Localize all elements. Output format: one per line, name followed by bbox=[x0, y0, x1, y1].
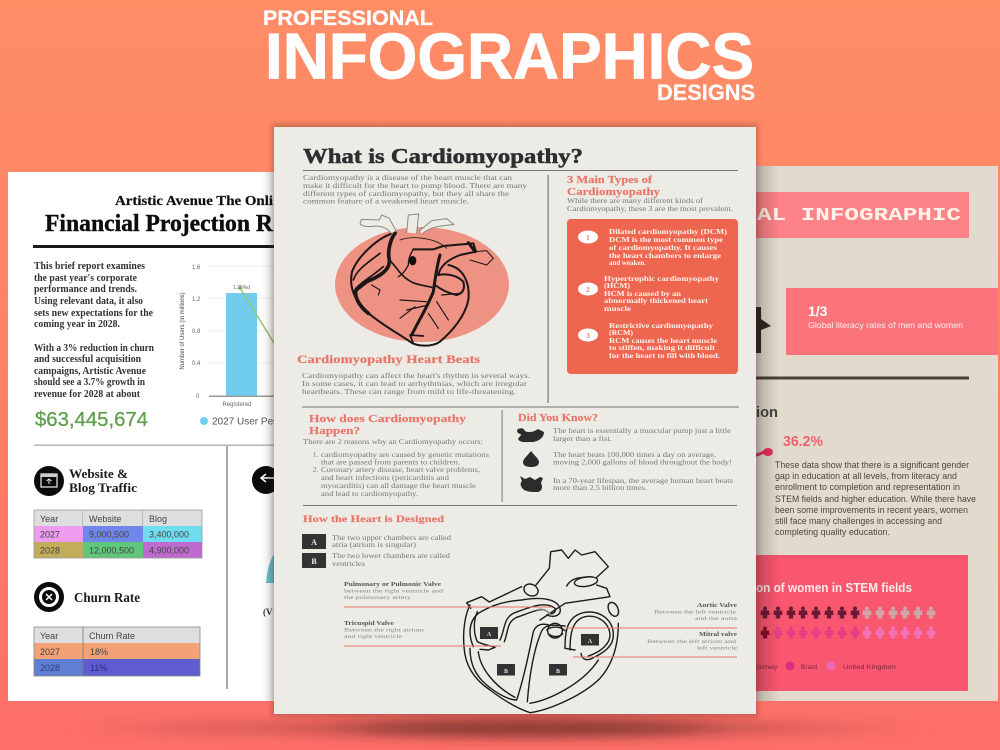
chamber labels: A bbox=[588, 639, 593, 645]
table: website and blog traffic: Website bbox=[89, 514, 121, 524]
types intro text: Cardiomyopathy, these 3 are the most prevalent. bbox=[567, 206, 733, 213]
paragraph: gender gap: been some improvements in recent years, women bbox=[775, 505, 968, 515]
title: INFOGRAPHICS bbox=[265, 20, 754, 92]
illustration: anatomical heart bbox=[335, 214, 509, 346]
chamber labels: B bbox=[504, 669, 508, 675]
type 3: to stiffen, making it difficult bbox=[609, 345, 716, 352]
callout: tricuspid valve: Tricuspid Valve bbox=[344, 621, 394, 627]
list: reasons: myocarditis) can all damage the heart muscle bbox=[321, 483, 476, 490]
table: churn rate: Year bbox=[40, 631, 58, 641]
callout: pulmonary valve: the pulmonary artery bbox=[344, 595, 411, 601]
report intro text: Using relevant data, it also bbox=[34, 296, 143, 307]
type 2: 2 bbox=[586, 286, 590, 294]
table: churn rate: 2027 bbox=[40, 647, 60, 657]
panel: three types card bbox=[567, 219, 738, 374]
website and blog traffic heading: Blog Traffic bbox=[69, 480, 137, 495]
list: reasons: There are 2 reasons why an Cardiomyopathy occurs: bbox=[303, 439, 483, 446]
type 2: (HCM) bbox=[604, 283, 630, 290]
callout: mitral valve: Mitral valve bbox=[699, 632, 737, 638]
list: reasons: and lead to cardiomyopathy. bbox=[321, 491, 418, 498]
paragraph: heart beats: Cardiomyopathy can affect the heart's rhythm in several ways. bbox=[302, 372, 530, 380]
report intro text: revenue for 2028 at about bbox=[34, 389, 141, 400]
callout: pulmonary valve: between the right ventricle and bbox=[344, 588, 443, 594]
bar chart bbox=[180, 264, 274, 425]
intro text: common feature of a weakened heart muscle. bbox=[303, 198, 469, 206]
callout: mitral valve: Between the left atrium and bbox=[647, 638, 736, 645]
did you know fact 3 bbox=[553, 478, 733, 492]
panel: women in STEM pictogram: Brazil bbox=[801, 664, 818, 671]
type 1: Dilated cardiomyopathy (DCM) bbox=[609, 229, 727, 236]
did you know fact 1: larger than a fist. bbox=[553, 436, 612, 443]
panel: women in STEM pictogram: Germany bbox=[756, 664, 778, 671]
table: website and blog traffic: 9,000,500 bbox=[89, 530, 129, 540]
type 3: for the heart to fill with blood. bbox=[609, 353, 720, 360]
panel: financial projection report bbox=[8, 172, 285, 701]
type 3: RCM causes the heart muscle bbox=[609, 338, 717, 345]
legend: chamber A: atria (atrium is singular) bbox=[332, 542, 416, 549]
did you know fact 3: more than 2.5 billion times. bbox=[553, 485, 647, 492]
did you know fact 2: The heart beats 100,000 times a day on average, bbox=[553, 452, 716, 459]
callout: tricuspid valve: Between the right atrium bbox=[344, 628, 425, 634]
report heading bbox=[45, 194, 274, 237]
legend: chamber B: The two lower chambers are called bbox=[332, 553, 451, 560]
type 1: DCM is the most common type bbox=[609, 237, 723, 244]
callout: aortic valve: and the aorta bbox=[695, 616, 738, 622]
website and blog traffic heading bbox=[69, 469, 137, 494]
banner: infographic title bbox=[740, 192, 969, 238]
clipped right column of the report bbox=[252, 466, 274, 617]
type 1: and weaken. bbox=[609, 260, 646, 267]
callout: mitral valve bbox=[573, 632, 738, 658]
paragraph: gender gap: completing quality education. bbox=[775, 527, 890, 537]
panel: global education infographic bbox=[740, 166, 998, 701]
list: reasons: that are passed from parents to children. bbox=[321, 460, 460, 466]
report intro text: should see a 3.7% growth in bbox=[34, 377, 145, 388]
main panel shadow bbox=[272, 124, 758, 716]
stat: literacy 1/3: Global literacy rates of men and women bbox=[808, 321, 963, 330]
bar chart: 0.4 bbox=[192, 361, 201, 367]
bar chart: Number of Users (in millions) bbox=[180, 292, 186, 370]
callout: tricuspid valve: and right ventricle bbox=[344, 634, 403, 640]
did you know fact 2 bbox=[553, 452, 732, 466]
report intro text bbox=[34, 261, 154, 400]
illustration: heart cross-section bbox=[464, 550, 621, 713]
section heading fragment: ion bbox=[756, 404, 778, 421]
type 2: muscle bbox=[604, 306, 631, 313]
report intro text: and successful acquisition bbox=[34, 354, 141, 365]
stat: literacy 1/3: 1/3 bbox=[808, 303, 828, 319]
report intro text: the past year's corporate bbox=[34, 273, 138, 284]
paragraph: heart beats: heartbeats. These can range from mild to life-threatening. bbox=[302, 388, 516, 396]
did you know fact 1: The heart is essentially a muscular pump just a little bbox=[553, 428, 731, 435]
stat: 36.2% bbox=[745, 433, 823, 456]
callout: aortic valve: Between the left ventricle bbox=[654, 608, 737, 616]
type 2: abnormally thickened heart bbox=[604, 298, 709, 305]
icon: churn x bbox=[34, 582, 64, 612]
icon: person figure bbox=[756, 307, 771, 353]
legend: chamber A: A bbox=[311, 538, 317, 547]
intro text bbox=[303, 174, 528, 206]
table: churn rate bbox=[34, 627, 200, 676]
icon: muscle bbox=[517, 428, 544, 442]
list: reasons: 1. bbox=[313, 452, 318, 459]
panel: women in STEM pictogram: United Kingdom bbox=[843, 664, 896, 671]
intro text: make it difficult for the heart to pump blood. There are many bbox=[303, 182, 528, 190]
type 2: HCM is caused by an bbox=[604, 291, 681, 298]
paragraph: gender gap bbox=[775, 460, 976, 537]
did you know fact 1 bbox=[553, 428, 731, 443]
paragraph: gender gap: gap in education at all levels, from literacy and bbox=[775, 471, 957, 481]
list: reasons: and heart infections (pericarditis and bbox=[321, 475, 450, 482]
report intro text: This brief report examines bbox=[34, 261, 145, 272]
stat: 36.2%: 36.2% bbox=[783, 433, 823, 450]
type 3: 3 bbox=[586, 332, 590, 340]
heading: heart beats: Cardiomyopathy Heart Beats bbox=[297, 352, 480, 366]
type 3 bbox=[578, 323, 720, 360]
report intro text: performance and trends. bbox=[34, 284, 137, 295]
callout: tricuspid valve bbox=[344, 621, 501, 646]
heading: how does it happen bbox=[309, 414, 466, 437]
paragraph: heart beats bbox=[302, 372, 530, 396]
icon: heart bbox=[520, 476, 543, 492]
heading: how does it happen: Happen? bbox=[309, 426, 360, 437]
list: reasons bbox=[303, 439, 489, 498]
paragraph: gender gap: still face many challenges in accessing and bbox=[775, 516, 942, 526]
icon: website monitor bbox=[34, 466, 64, 496]
type 3: (RCM) bbox=[609, 330, 633, 337]
report heading: Artistic Avenue The Onli bbox=[115, 194, 273, 209]
title: DESIGNS bbox=[657, 80, 755, 105]
report intro text: campaigns, Artistic Avenue bbox=[34, 366, 147, 377]
bar chart: 0 bbox=[196, 394, 200, 400]
type 1: of cardiomyopathy. It causes bbox=[609, 245, 717, 252]
intro text: different types of cardiomyopathy, but they all share the bbox=[303, 190, 509, 198]
callout: aortic valve bbox=[565, 603, 738, 628]
main heading: What is Cardiomyopathy? bbox=[303, 144, 583, 168]
clipped right column of the report: (V bbox=[263, 607, 273, 617]
type 3: Restrictive cardiomyopathy bbox=[609, 323, 714, 330]
chamber labels: B bbox=[556, 669, 560, 675]
did you know fact 2: moving 2,000 gallons of blood throughout the body! bbox=[553, 460, 732, 466]
paragraph: heart beats: In some cases, it can lead to arrhythmias, which are irregular bbox=[302, 380, 528, 388]
intro text: Cardiomyopathy is a disease of the heart muscle that can bbox=[303, 174, 513, 182]
title: PROFESSIONAL bbox=[263, 7, 433, 30]
table: website and blog traffic: 3,400,000 bbox=[149, 530, 189, 540]
report intro text: With a 3% reduction in churn bbox=[34, 343, 154, 354]
paragraph: gender gap: enrollment to completion and representation in bbox=[775, 482, 960, 492]
callout: pulmonary valve: Pulmonary or Pulmonic Valve bbox=[344, 582, 441, 588]
bar chart: Registered bbox=[222, 402, 252, 408]
table: churn rate: 18% bbox=[90, 647, 108, 657]
panel: women in STEM pictogram bbox=[740, 555, 968, 691]
bar chart: 0.8 bbox=[192, 329, 201, 335]
chamber labels bbox=[480, 627, 599, 676]
did you know fact 3: In a 70-year lifespan, the average human heart beats bbox=[553, 478, 733, 485]
types intro text bbox=[567, 198, 733, 213]
heading: how does it happen: How does Cardiomyopathy bbox=[309, 414, 466, 425]
callout: mitral valve: left ventricle bbox=[697, 644, 738, 652]
types intro text: While there are many different kinds of bbox=[567, 198, 704, 205]
table: churn rate: 2028 bbox=[40, 663, 60, 673]
paragraph: gender gap: STEM fields and higher education. While there have bbox=[775, 494, 976, 504]
table: website and blog traffic: 2028 bbox=[40, 546, 60, 556]
stat: literacy 1/3 bbox=[786, 288, 998, 355]
report heading: Financial Projection R bbox=[45, 211, 274, 237]
revenue figure: $63,445,674 bbox=[35, 409, 148, 431]
ground shadow bbox=[120, 719, 880, 737]
type 1 bbox=[578, 229, 727, 267]
bar chart: 1.2 bbox=[192, 297, 201, 303]
table: website and blog traffic: 4,900,000 bbox=[149, 546, 189, 556]
heading: did you know: Did You Know? bbox=[518, 413, 598, 424]
banner: infographic title: AL INFOGRAPHIC bbox=[757, 206, 961, 226]
list: reasons: Coronary artery disease, heart valve problems, bbox=[321, 467, 480, 474]
report intro text: sets new expectations for the bbox=[34, 308, 154, 319]
panel: women in STEM pictogram: on of women in STEM fields bbox=[756, 580, 912, 595]
report intro text: coming year in 2028. bbox=[34, 319, 120, 330]
legend: chamber B: ventricles bbox=[332, 561, 365, 568]
heading: 3 main types bbox=[567, 175, 660, 198]
chamber labels: A bbox=[487, 632, 492, 638]
legend: chamber B: B bbox=[311, 557, 317, 566]
panel: what is cardiomyopathy bbox=[274, 127, 756, 714]
website and blog traffic heading: Website & bbox=[69, 466, 128, 481]
table: website and blog traffic: Year bbox=[40, 514, 58, 524]
table: website and blog traffic: 2027 bbox=[40, 530, 60, 540]
paragraph: gender gap: These data show that there is a significant gender bbox=[775, 460, 969, 470]
table: churn rate: 11% bbox=[90, 663, 107, 673]
table: churn rate: Churn Rate bbox=[89, 631, 135, 641]
callout: pulmonary valve bbox=[344, 582, 552, 608]
bar chart: 1.6 bbox=[192, 265, 201, 271]
table: website and blog traffic: Blog bbox=[149, 514, 167, 524]
legend: chamber B bbox=[302, 553, 451, 568]
icon: blood drop bbox=[523, 451, 539, 467]
table: website and blog traffic bbox=[34, 510, 202, 558]
legend: chamber A bbox=[302, 534, 452, 549]
list: reasons: 2. bbox=[313, 467, 318, 474]
heading: 3 main types: Cardiomyopathy bbox=[567, 187, 660, 198]
callout: aortic valve: Aortic Valve bbox=[697, 603, 737, 609]
table: website and blog traffic: 12,000,500 bbox=[89, 546, 134, 556]
heading: 3 main types: 3 Main Types of bbox=[567, 175, 653, 186]
type 1: the heart chambers to enlarge bbox=[609, 253, 721, 260]
bar chart: 1.25%d bbox=[233, 285, 250, 291]
type 2 bbox=[578, 276, 720, 313]
legend: chamber A: The two upper chambers are called bbox=[332, 535, 452, 542]
list: reasons: cardiomyopathy are caused by genetic mutations bbox=[321, 452, 489, 459]
heading: how the heart is designed: How the Heart is Designed bbox=[303, 515, 445, 525]
bar chart: 2027 User Perfo bbox=[212, 416, 285, 428]
type 2: Hypertrophic cardiomyopathy bbox=[604, 276, 720, 283]
churn rate heading: Churn Rate bbox=[74, 591, 140, 606]
type 1: 1 bbox=[586, 234, 590, 242]
